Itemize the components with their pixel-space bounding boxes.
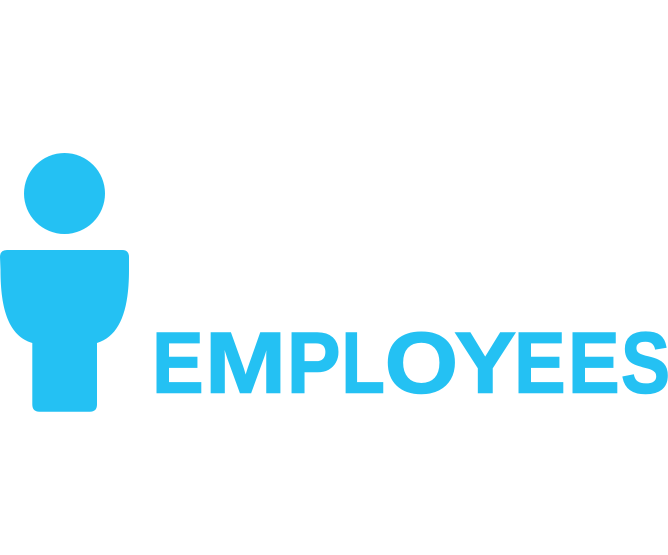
- icon: person head: [24, 153, 105, 234]
- heading: EMPLOYEES: Y: [454, 314, 516, 411]
- heading: EMPLOYEES: E: [152, 315, 204, 411]
- heading: EMPLOYEES: O: [385, 315, 458, 411]
- heading: EMPLOYEES: E: [514, 315, 566, 411]
- heading: EMPLOYEES: M: [205, 314, 286, 411]
- icon: person body: [0, 250, 129, 412]
- heading: EMPLOYEES: L: [342, 314, 385, 411]
- icon: person: [0, 153, 129, 412]
- heading: EMPLOYEES: [152, 314, 668, 412]
- heading: EMPLOYEES: E: [568, 315, 620, 411]
- heading: EMPLOYEES: P: [287, 314, 341, 411]
